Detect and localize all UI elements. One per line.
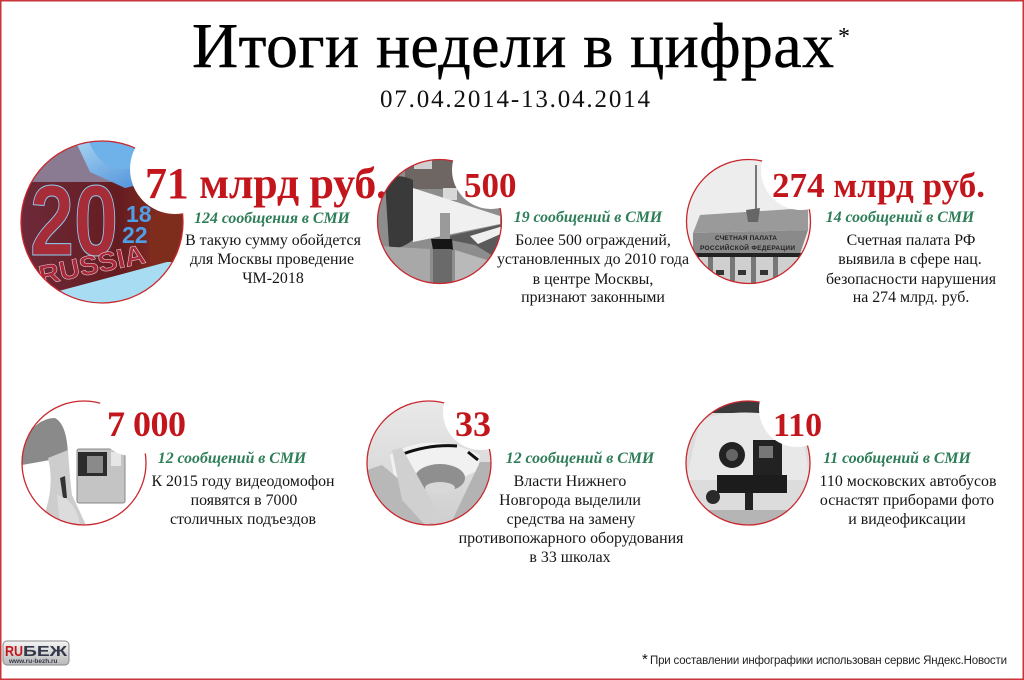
- description: и видеофиксации: [848, 511, 966, 528]
- notch: [761, 130, 841, 210]
- photo outline: [686, 401, 810, 525]
- mentions: 14 сообщений в СМИ: [826, 209, 975, 226]
- photo: photo and video recording device: [686, 401, 810, 525]
- notch: [96, 384, 168, 456]
- description: противопожарного оборудования: [459, 530, 684, 547]
- figure: 500: [464, 166, 516, 205]
- description: в центре Москвы,: [533, 271, 653, 288]
- description: [459, 473, 684, 566]
- footnote: При составлении инфографики использован сервис Яндекс.Новости: [650, 655, 1007, 667]
- photo: barrier: [377, 159, 503, 285]
- notch: [759, 371, 835, 447]
- description: ЧМ-2018: [242, 270, 304, 287]
- description: Власти Нижнего: [514, 473, 626, 490]
- logo: RUБЕЖ: [3, 641, 69, 665]
- description: установленных до 2010 года: [497, 251, 689, 268]
- photo: Russia 2018 logo: 22: [122, 222, 148, 248]
- logo: RUБЕЖ: www.ru-bezh.ru: [8, 658, 58, 665]
- description: в 33 школах: [529, 549, 611, 566]
- mentions: 12 сообщений в СМИ: [158, 450, 307, 467]
- panel: 500: [376, 158, 689, 306]
- mentions: 11 сообщений в СМИ: [823, 450, 971, 467]
- description: на 274 млрд. руб.: [853, 289, 969, 306]
- photo: Russia 2018 logo: RUSSIA: [36, 239, 148, 291]
- description: средства на замену: [507, 511, 635, 528]
- photo outline: [378, 160, 502, 284]
- title: Итоги недели в цифрах: [192, 10, 834, 81]
- photo: woman with intercom: [22, 418, 126, 524]
- panel: 7 000: [21, 400, 334, 527]
- description: К 2015 году видеодомофон: [151, 473, 335, 490]
- photo outline: [21, 141, 183, 303]
- description: Счетная палата РФ: [847, 232, 975, 249]
- notch: [443, 374, 519, 450]
- description: Более 500 ограждений,: [515, 232, 671, 249]
- description: [497, 232, 689, 306]
- logo: RUБЕЖ: RU: [5, 643, 23, 660]
- panel: 274 billion: [686, 158, 996, 306]
- mentions: 124 сообщения в СМИ: [194, 210, 351, 227]
- photo: Russia 2018 logo: [20, 140, 185, 305]
- footnote: [642, 651, 1007, 668]
- figure: 110: [773, 407, 822, 444]
- photo outline: [686, 160, 810, 284]
- photo: Accounts Chamber building: РОССИЙСКОЙ ФЕДЕРАЦИИ: [700, 243, 795, 252]
- description: В такую сумму обойдется: [185, 232, 362, 249]
- figure: 274 млрд руб.: [772, 166, 985, 205]
- photo outline: [367, 401, 491, 525]
- photo: Accounts Chamber building: СЧЕТНАЯ ПАЛАТА: [715, 235, 777, 242]
- description: столичных подъездов: [170, 511, 316, 528]
- description: Новгорода выделили: [499, 492, 641, 509]
- panel: 33: [366, 400, 684, 562]
- photo outline: [22, 401, 146, 525]
- description: [826, 232, 997, 306]
- date range: 07.04.2014-13.04.2014: [380, 86, 650, 113]
- photo: Russia 2018 logo: 20: [30, 165, 118, 277]
- notch: [130, 124, 220, 214]
- description: безопасности нарушения: [826, 271, 997, 288]
- figure: 71 млрд руб.: [145, 159, 387, 208]
- mentions: 12 сообщений в СМИ: [506, 450, 655, 467]
- description: для Москвы проведение: [190, 251, 354, 268]
- description: выявила в сфере нац.: [838, 251, 982, 268]
- title: *: [838, 24, 850, 50]
- panel: 71 billion: [20, 140, 384, 304]
- description: [185, 232, 362, 287]
- description: [151, 473, 335, 528]
- description: появятся в 7000: [191, 492, 297, 509]
- panel: 110: [685, 400, 996, 528]
- figure: 33: [455, 404, 491, 444]
- description: признают законными: [521, 289, 665, 306]
- photo: smoke detector: [367, 401, 491, 525]
- figure: 7 000: [107, 404, 186, 444]
- mentions: 19 сообщений в СМИ: [514, 209, 663, 226]
- notch: [452, 131, 530, 209]
- description: [820, 473, 996, 528]
- photo: Russia 2018 logo: 18: [126, 201, 152, 227]
- logo: RUБЕЖ: БЕЖ: [23, 643, 68, 660]
- photo: Accounts Chamber building: [686, 159, 812, 285]
- description: 110 московских автобусов: [820, 473, 996, 490]
- description: оснастят приборами фото: [820, 492, 994, 509]
- footnote: *: [642, 651, 648, 668]
